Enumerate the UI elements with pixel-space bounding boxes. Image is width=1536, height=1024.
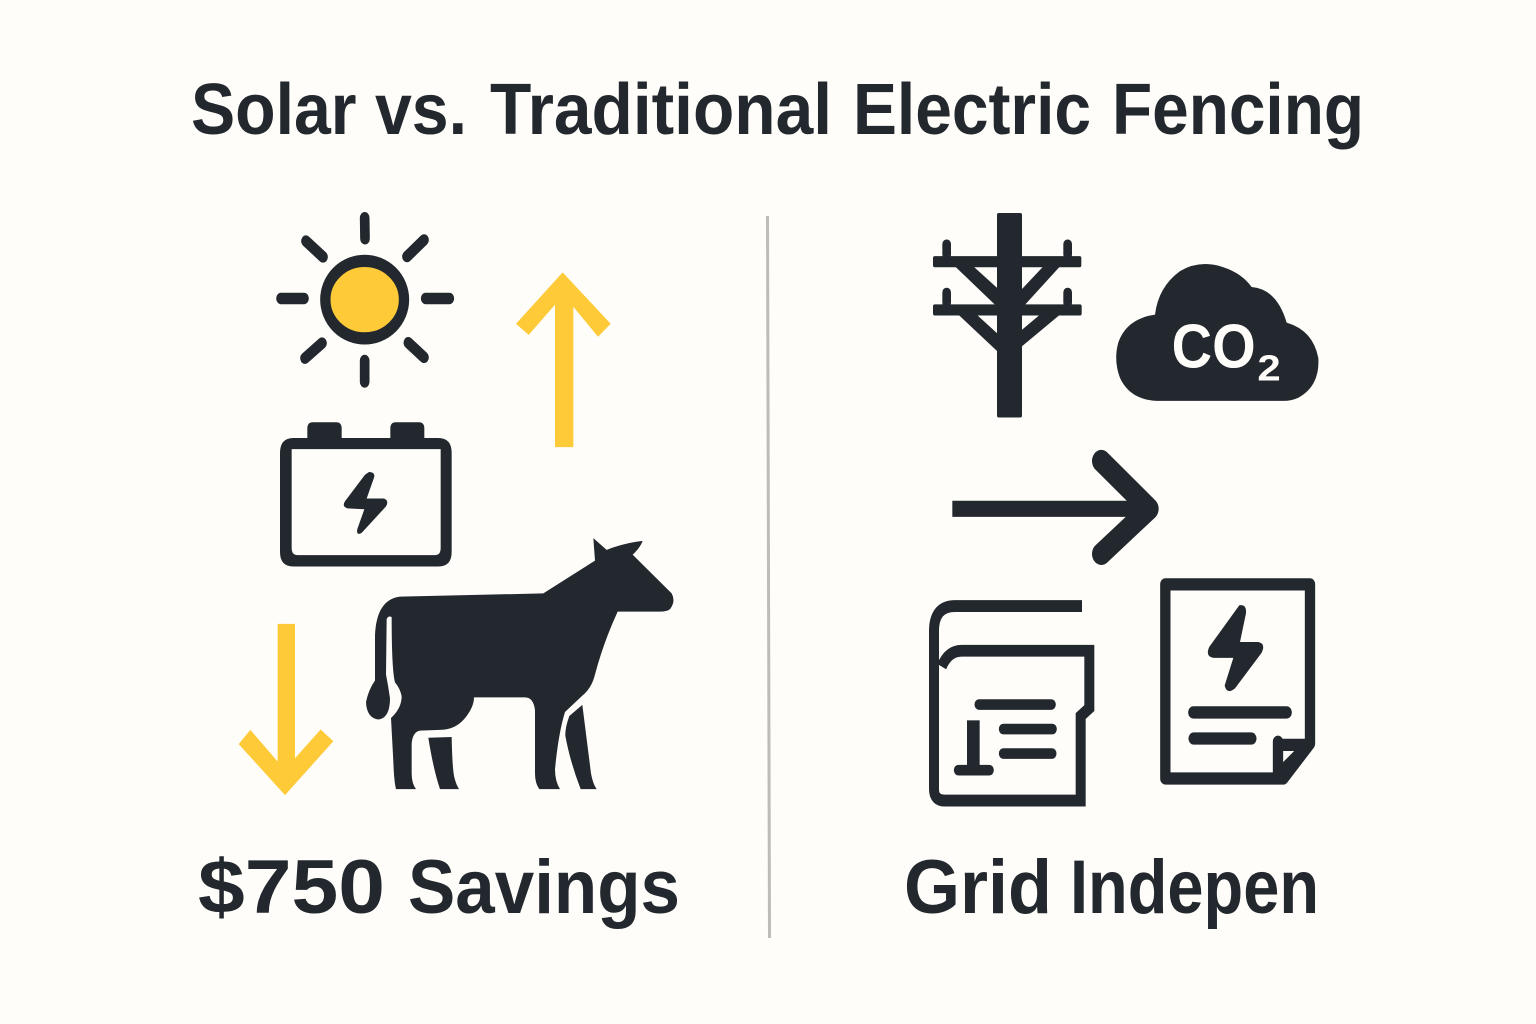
icon: utility pole [933, 213, 1082, 417]
grid independence label: Grid [904, 845, 1052, 930]
icon: sun [281, 218, 449, 382]
savings label: Savings [408, 845, 680, 930]
title: Solar vs. [191, 70, 467, 150]
icon: cow [366, 538, 673, 789]
panel: solar [198, 218, 680, 930]
CO2 label: CO [1172, 313, 1256, 382]
title: Fencing [1112, 70, 1364, 150]
title: Electric [853, 70, 1091, 150]
arrow: right dark [952, 461, 1149, 554]
icon: battery [280, 422, 452, 567]
grid independence label: Indepen [1070, 845, 1319, 930]
icon: bill document [934, 606, 1089, 801]
savings label: $750 [198, 845, 385, 930]
title: Traditional [490, 70, 832, 150]
panel: traditional [904, 213, 1319, 930]
icon: CO2 cloud [1116, 264, 1318, 401]
arrow: down yellow [239, 624, 333, 795]
arrow: up yellow [516, 272, 611, 447]
center divider [768, 216, 770, 938]
subscript 2: 2 [1257, 349, 1281, 389]
icon: electric bill page [1165, 584, 1310, 778]
